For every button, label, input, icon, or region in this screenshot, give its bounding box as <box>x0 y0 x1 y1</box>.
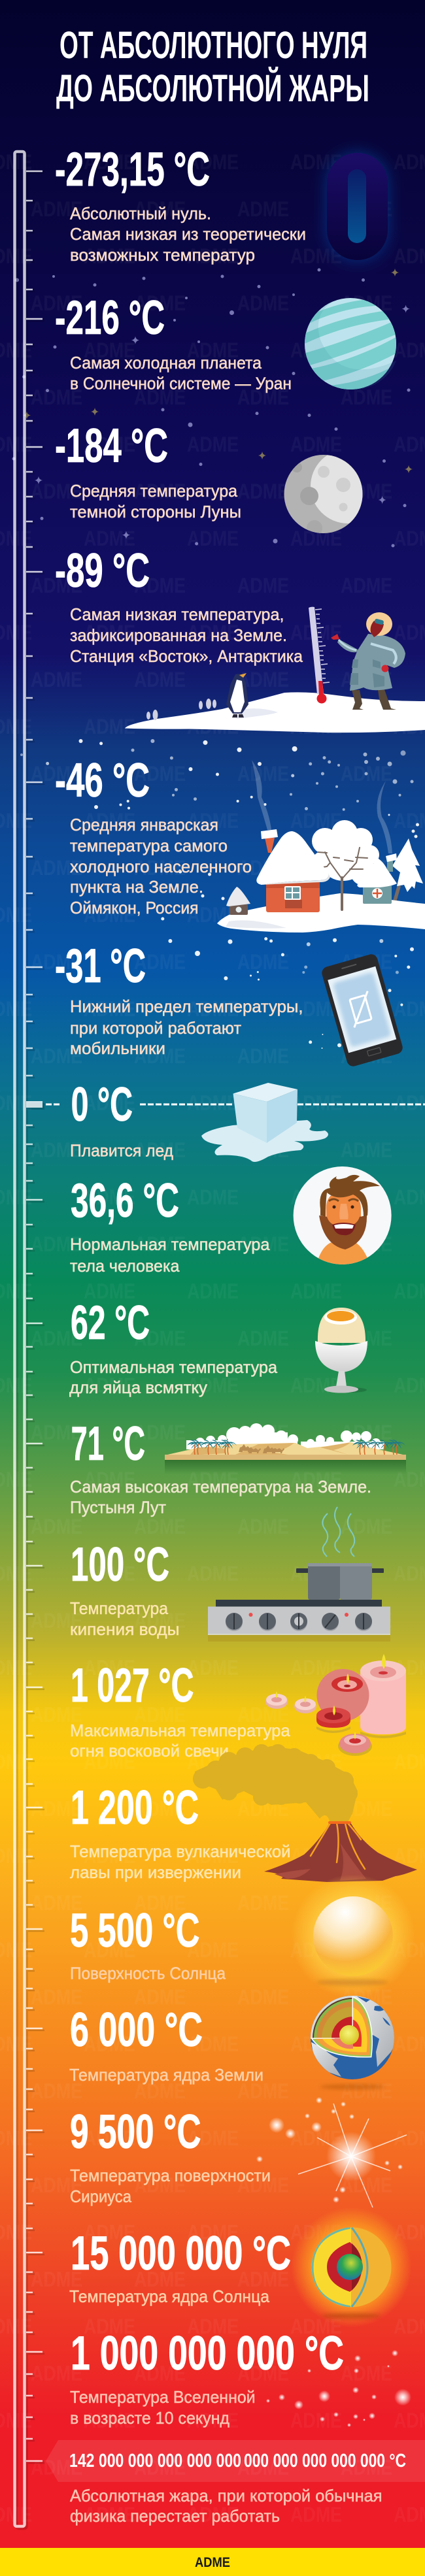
falling snow <box>20 739 419 1049</box>
zero mark <box>26 1101 42 1108</box>
entry: zero <box>70 1078 173 1161</box>
icon: Earth cross-section <box>311 1994 396 2090</box>
icon: Sun <box>291 1874 415 1998</box>
red candle <box>316 1715 350 1728</box>
entry: egg: Оптимальная температура <box>70 1357 278 1377</box>
land masses <box>353 1994 396 2067</box>
entry: lava: 1 200 °C <box>71 1781 199 1834</box>
icon: Sirius star <box>256 2097 407 2207</box>
explorer <box>331 612 405 710</box>
thermometer tube <box>14 152 25 2526</box>
entry: candle: Максимальная температура <box>70 1721 290 1740</box>
entry: Sirius: 9 500 °C <box>70 2105 201 2158</box>
entry: early universe: Температура Вселенной <box>70 2387 256 2407</box>
entry: Sirius: Температура поверхности <box>70 2166 271 2185</box>
thermometer <box>309 607 330 703</box>
red house <box>256 829 330 912</box>
entry: Vostok station: Самая низкая температура, <box>70 604 284 624</box>
entry: absolute zero: -273,15 °C <box>55 143 210 196</box>
icon: candles <box>265 1654 406 1756</box>
ice shelf <box>125 692 425 733</box>
zero line dashed <box>46 1103 425 1106</box>
entry: Sun surface <box>70 1904 226 1983</box>
illustration: Lut desert <box>165 1423 406 1474</box>
entry: boiling: Температура <box>70 1598 169 1618</box>
icon: glowing zero <box>327 153 388 260</box>
entry: Uranus: в Солнечной системе — Уран <box>70 374 292 393</box>
entry: absolute heat: физика перестает работать <box>70 2506 280 2526</box>
entry: body temperature: Нормальная температура <box>70 1234 270 1254</box>
entry: Vostok station: зафиксированная на Земле. <box>70 625 287 645</box>
clouds <box>186 1423 384 1449</box>
entry: Uranus: Самая холодная планета <box>70 353 262 372</box>
chimney smoke <box>252 760 392 853</box>
entry: Sirius: Сириуса <box>70 2187 131 2206</box>
entry: lava: Температура вулканической <box>70 1841 290 1861</box>
entry: egg <box>69 1296 278 1397</box>
icon: Sun core cross-section <box>292 2207 412 2328</box>
palms right <box>352 1440 405 1455</box>
icon: Moon <box>284 455 362 533</box>
entry: Moon: -184 °C <box>55 420 168 472</box>
entry: Moon <box>55 420 241 521</box>
entry: boiling <box>70 1538 179 1639</box>
big penguin <box>226 673 248 718</box>
steam <box>322 1507 354 1557</box>
entry: Lut desert <box>70 1417 371 1517</box>
icon: volcano <box>193 1744 417 1882</box>
entry: Moon: Средняя температура <box>70 481 238 501</box>
entry: Oymyakon: холодного населенного <box>70 857 252 876</box>
cone <box>264 1821 417 1882</box>
entry: early universe: в возрасте 10 секунд <box>70 2408 230 2428</box>
entry: Vostok station: Станция «Восток», Антарктика <box>70 646 303 666</box>
icon: frozen phone <box>320 953 404 1068</box>
entry: phones: Нижний предел температуры, <box>70 997 303 1016</box>
spruce <box>392 838 423 904</box>
entry: egg: 62 °C <box>71 1296 150 1349</box>
entry: Sun surface: Поверхность Солнца <box>70 1963 226 1983</box>
entry: absolute heat: 142 000 000 000 000 000 <box>69 2451 241 2471</box>
entry: Oymyakon: пункта на Земле. <box>70 877 203 897</box>
entry: candle: 1 027 °C <box>71 1659 194 1712</box>
entry: egg: для яйца всмятку <box>69 1378 207 1397</box>
illustration: Oymyakon village <box>217 760 425 933</box>
major ticks <box>26 171 42 2461</box>
entry: absolute zero <box>55 143 306 265</box>
entry: Oymyakon: Средняя январская <box>70 815 218 834</box>
sparkles: early universe <box>266 2350 411 2427</box>
entry: Oymyakon: -46 °C <box>55 754 150 807</box>
entry: Earth core: Температура ядра Земли <box>69 2065 264 2085</box>
entry: absolute zero: возможных температур <box>70 245 255 265</box>
icon: boiled egg <box>315 1308 367 1393</box>
entry: zero: Плавится лед <box>70 1141 173 1161</box>
entry: lava: лавы при извержении <box>70 1862 241 1882</box>
stars in space <box>12 268 413 548</box>
entry: Lut desert: Пустыня Лут <box>70 1498 166 1517</box>
icon: Uranus <box>302 298 400 392</box>
entry: phones: -31 °C <box>55 940 146 993</box>
entry: body temperature <box>70 1174 270 1276</box>
entry: Lut desert: Самая высокая температура на Земле. <box>70 1477 371 1496</box>
entry: early universe <box>70 2327 344 2428</box>
entry: candle: огня восковой свечи <box>70 1741 229 1760</box>
icon: bearded man <box>294 1166 392 1264</box>
absolute heat banner <box>46 2440 425 2482</box>
ground <box>165 1455 406 1460</box>
thermometer scale <box>14 152 42 2526</box>
lava streaks <box>311 1823 365 1869</box>
ball candle <box>316 1669 369 1721</box>
entry: boiling: 100 °C <box>71 1538 169 1591</box>
entry: Earth core: 6 000 °C <box>70 2004 203 2056</box>
icon: melting ice cube <box>201 1083 328 1162</box>
entry: lava <box>70 1781 290 1882</box>
illustration: Antarctica <box>125 607 425 733</box>
knobs <box>226 1613 372 1631</box>
bare tree <box>318 848 367 910</box>
title <box>56 24 369 110</box>
entry: candle <box>70 1659 290 1760</box>
entry: Oymyakon <box>55 754 252 917</box>
entry: Sun core: 15 000 000 °C <box>71 2227 291 2280</box>
entry: phones <box>55 940 303 1058</box>
footer logo: ADME <box>195 2555 230 2570</box>
entry: phones: при которой работают <box>70 1018 241 1038</box>
entry: absolute heat <box>69 2451 406 2526</box>
entry: phones: мобильники <box>70 1038 165 1058</box>
big candle <box>360 1670 406 1734</box>
grey house <box>357 853 397 904</box>
palms left <box>187 1440 237 1455</box>
entry: absolute zero: Абсолютный нуль. <box>70 203 211 223</box>
entry: Oymyakon: температура самого <box>70 836 228 855</box>
snow ground <box>217 893 425 933</box>
layers upper quadrant <box>313 1998 353 2038</box>
entry: Uranus <box>55 291 292 393</box>
entry: zero: 0 °C <box>71 1078 133 1131</box>
tea lights <box>265 1691 406 1756</box>
entry: Sirius <box>70 2105 271 2206</box>
footer bar <box>0 2548 425 2576</box>
entry: body temperature: тела человека <box>70 1256 180 1276</box>
smoke cloud <box>193 1744 358 1823</box>
stove <box>208 1635 390 1642</box>
icon: pot on stove <box>208 1507 390 1642</box>
small penguins <box>146 699 216 720</box>
pot <box>296 1568 384 1573</box>
dunes <box>165 1442 406 1455</box>
entry: body temperature: 36,6 °C <box>71 1174 179 1227</box>
entry: Sun surface: 5 500 °C <box>70 1904 200 1957</box>
entry: Sun core: Температура ядра Солнца <box>69 2287 270 2306</box>
small hut <box>226 887 250 915</box>
entry: Vostok station: -89 °C <box>55 544 150 597</box>
entry: Sun core <box>69 2227 291 2306</box>
wedge layers <box>313 1998 371 2056</box>
entry: boiling: кипения воды <box>70 1619 179 1639</box>
entry: Uranus: -216 °C <box>55 291 165 344</box>
snow bushes <box>312 820 379 885</box>
entry: Earth core <box>69 2004 264 2085</box>
camels <box>239 1444 284 1453</box>
entry: Vostok station <box>55 544 303 666</box>
entry: Moon: темной стороны Луны <box>70 502 241 521</box>
minor ticks <box>26 201 33 2439</box>
entry: absolute zero: Самая низкая из теоретически <box>70 224 306 244</box>
entry: absolute heat: Абсолютная жара, при которой обычная <box>70 2486 382 2505</box>
entry: Oymyakon: Оймякон, Россия <box>70 898 199 917</box>
entry: Lut desert: 71 °C <box>71 1417 145 1470</box>
